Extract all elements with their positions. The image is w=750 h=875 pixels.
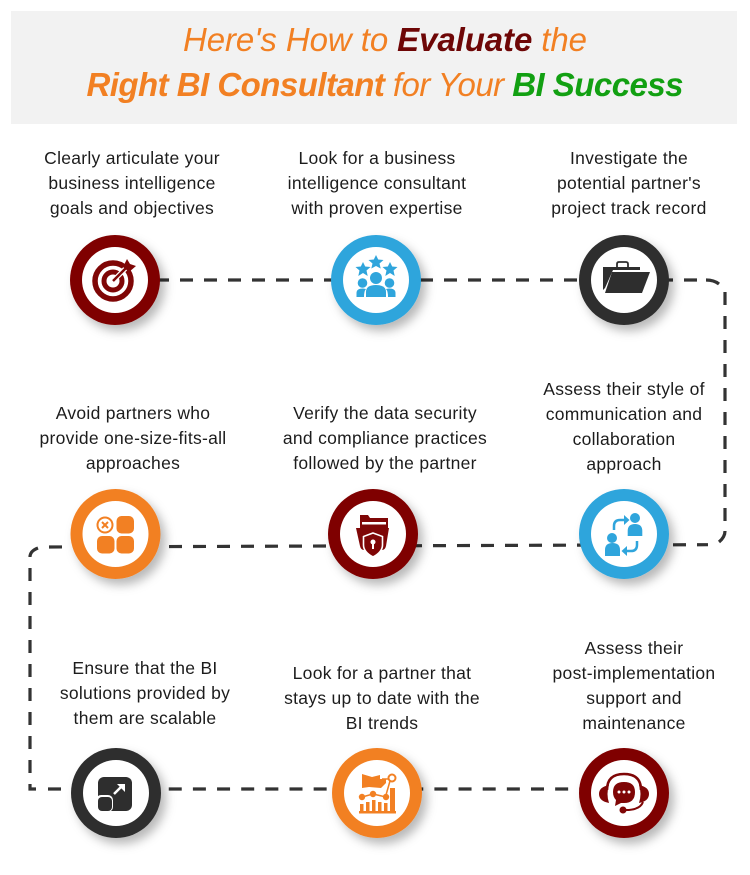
step 4 icon: grid with cross [70,489,160,579]
step 5 icon: secure folder [328,489,418,579]
step 7 text [60,658,230,728]
step 9 text: post-implementation [553,663,715,683]
step 7 text: Ensure that the BI [72,658,218,678]
step 7 text: them are scalable [74,708,216,728]
step 5 text [283,403,487,473]
step 7 icon: scale up [71,748,161,838]
step 8 icon: trends chart [332,748,422,838]
step 7 text: solutions provided by [60,683,230,703]
step 1 text [44,148,220,218]
step 3 text [551,148,707,218]
step 4 text: approaches [86,453,180,473]
title: Here's How to Evaluate the [183,21,587,58]
step 8 text: stays up to date with the [284,688,480,708]
step 9 icon: support headset [579,748,669,838]
step 6 text: communication and [546,404,702,424]
step 8 text: Look for a partner that [293,663,471,683]
step 4 text: Avoid partners who [56,403,210,423]
step 6 text [543,379,705,474]
step 6 icon: people exchanging [579,489,669,579]
step 8 text [284,663,480,733]
step 9 text: support and [586,688,682,708]
step 1 text: Clearly articulate your [44,148,220,168]
step 6 text: Assess their style of [543,379,705,399]
step 2 text: Look for a business [298,148,456,168]
step 6 text: approach [586,454,662,474]
step 2 icon: team with stars [331,235,421,325]
step 1 icon: target [70,235,160,325]
step 3 text: Investigate the [570,148,688,168]
step 1 text: goals and objectives [50,198,214,218]
step 5 text: Verify the data security [293,403,477,423]
title: Right BI Consultant for Your BI Success [86,66,684,103]
step 6 text: collaboration [573,429,675,449]
step 9 text [553,638,715,733]
step 3 text: potential partner's [557,173,701,193]
step 8 text: BI trends [346,713,418,733]
title [86,21,684,103]
step 4 text [40,403,226,473]
step 4 text: provide one-size-fits-all [40,428,226,448]
step 3 icon: folder [579,235,669,325]
header panel [11,11,737,124]
step 1 text: business intelligence [48,173,216,193]
step 2 text [288,148,466,218]
step 3 text: project track record [551,198,707,218]
step 2 text: intelligence consultant [288,173,466,193]
step 9 text: maintenance [582,713,686,733]
step 2 text: with proven expertise [290,198,463,218]
step 9 text: Assess their [585,638,683,658]
step 5 text: followed by the partner [293,453,477,473]
dashed connector path [30,280,725,789]
step 5 text: and compliance practices [283,428,487,448]
